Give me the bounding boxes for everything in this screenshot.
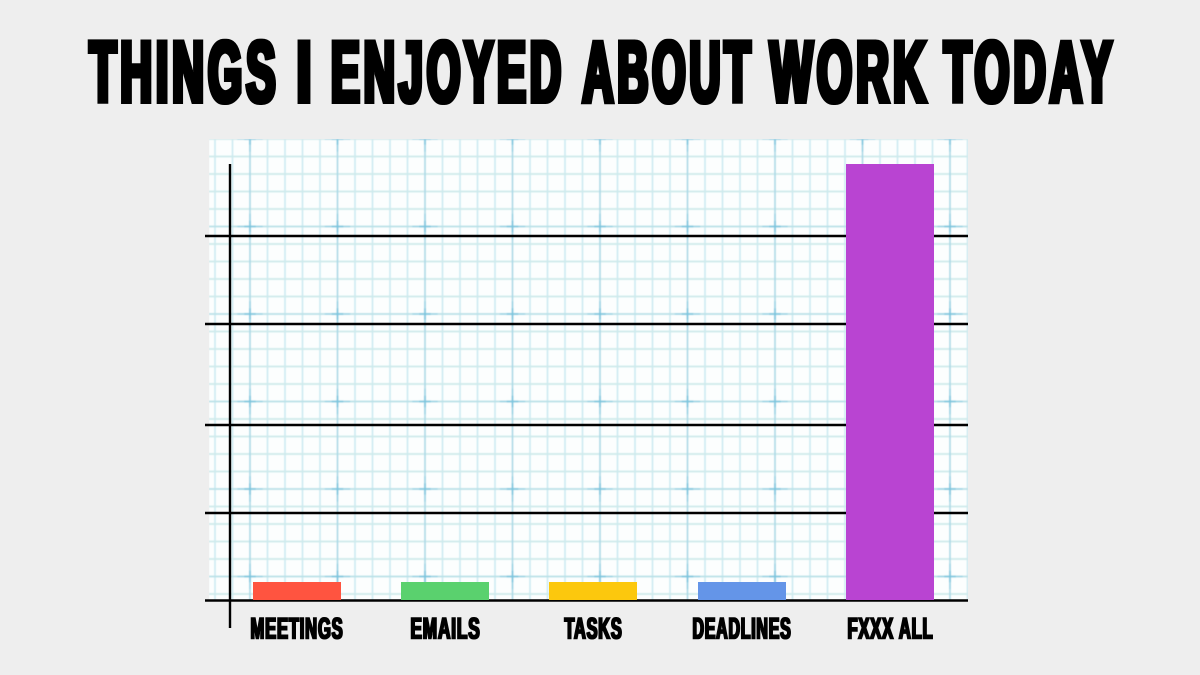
horizontal chart lines [205,236,968,600]
bar: meetings [253,582,341,600]
title: WORK [770,24,930,120]
title [90,24,1116,120]
label: meetings: MEETINGS [250,612,344,646]
vertical axis [229,164,231,628]
graph paper background [209,139,968,600]
label: fxxx all: FXXX ALL [848,612,934,646]
bar: tasks [549,582,637,600]
label: deadlines: DEADLINES [692,612,792,646]
bar: fxxx all [846,164,934,600]
bar: deadlines [698,582,786,600]
title: ENJOYED [331,24,565,120]
title: I [296,24,316,120]
panel: bar chart [205,139,968,646]
label: tasks: TASKS [564,612,622,646]
label: emails: EMAILS [410,612,480,646]
title: ABOUT [582,24,754,120]
bar: emails [401,582,489,600]
title: THINGS [90,24,280,120]
